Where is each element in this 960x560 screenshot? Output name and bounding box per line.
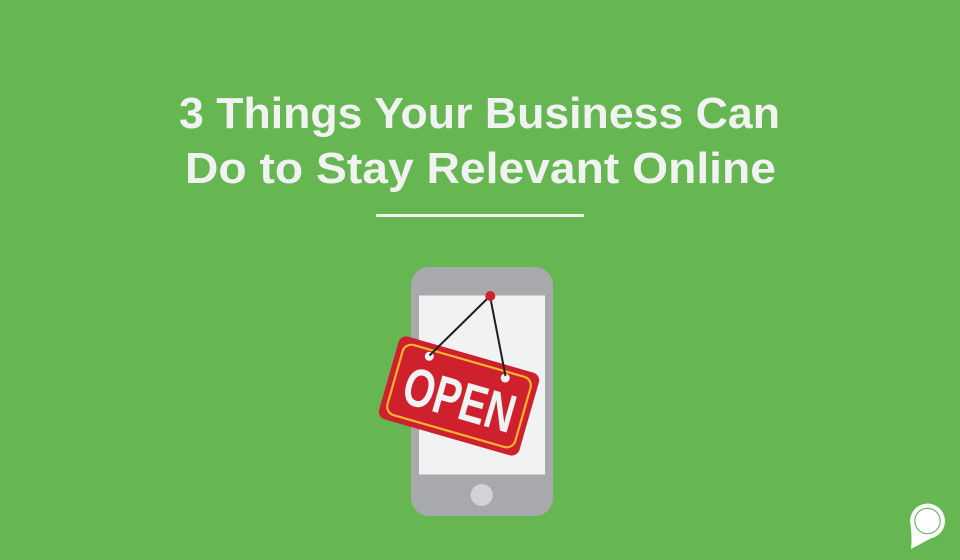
- title: Do to Stay Relevant Online: [185, 144, 776, 193]
- icon: open sign: OPEN: [396, 356, 522, 445]
- title: [179, 89, 780, 193]
- icon: open sign: [377, 291, 541, 457]
- title underline: [376, 214, 584, 217]
- icon: brand logo speech bubble: [910, 504, 945, 549]
- icon: smartphone: [411, 267, 553, 516]
- title: 3 Things Your Business Can: [179, 89, 780, 138]
